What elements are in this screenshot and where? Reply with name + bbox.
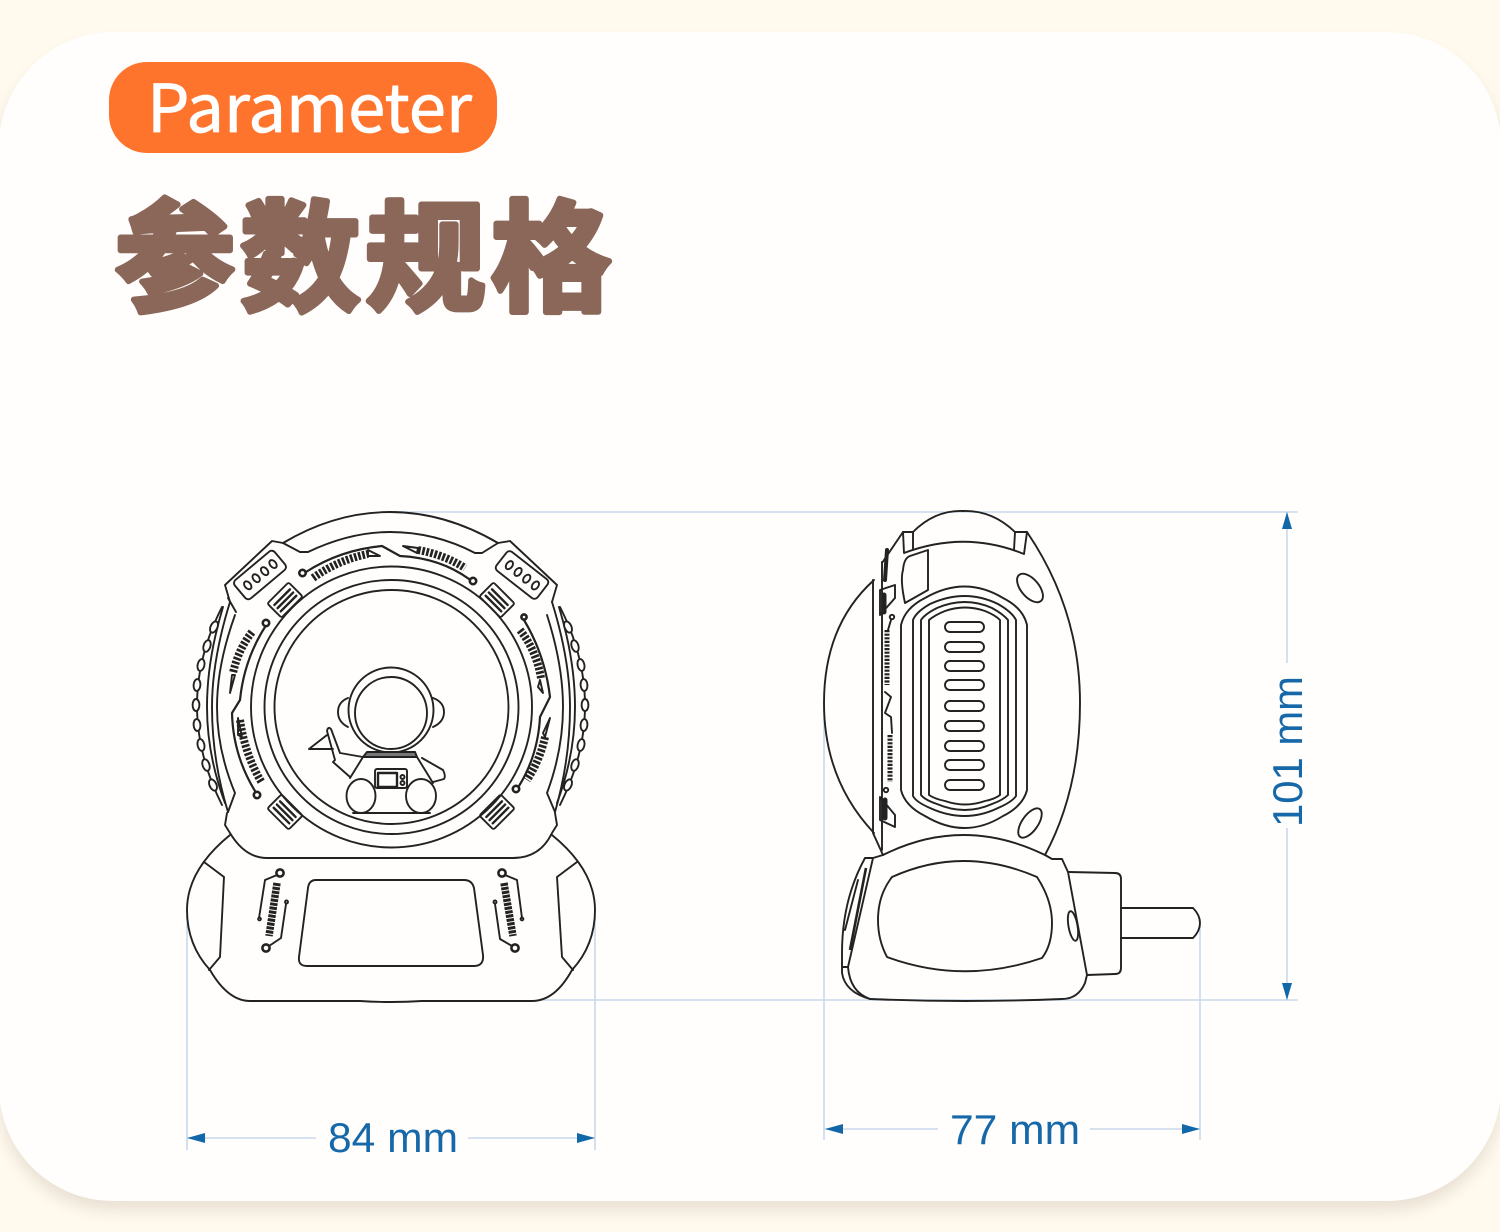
title: 参数规格: 参数规格	[115, 193, 611, 327]
base: side panels	[204, 862, 577, 970]
front view: main frame	[225, 532, 557, 858]
badge: Parameter: Parameter	[147, 56, 472, 152]
dimension: 84 mm width: 84 mm	[328, 1114, 458, 1161]
base: body outline	[848, 835, 1087, 1001]
icon: vent top right	[479, 582, 515, 618]
front view: side rails	[197, 598, 585, 812]
icon: button badge right	[494, 550, 550, 600]
base: front edge	[842, 858, 873, 999]
base: display screen	[299, 880, 483, 966]
base: left hatched band	[269, 883, 277, 936]
icon: vent top left	[267, 582, 303, 618]
dimension: 77 mm depth: 77 mm	[950, 1106, 1080, 1153]
side view: base	[842, 835, 1200, 1001]
front view: circuit traces	[232, 546, 550, 798]
front view: lens rings	[251, 566, 532, 848]
base: left circuit	[258, 869, 288, 952]
base: right hatched band	[504, 883, 513, 936]
base: small oval button	[1066, 910, 1080, 942]
icon: screw oval bottom	[1014, 804, 1046, 842]
icon: vent bottom left	[267, 794, 303, 830]
dimension: 77 mm depth	[825, 1106, 1200, 1153]
side view: front lens dome	[824, 580, 874, 833]
front view: gauge end triangles	[230, 546, 550, 737]
drawing: side view of device	[824, 511, 1200, 1001]
plug: pin	[1121, 908, 1200, 938]
icon: screw oval top	[1012, 569, 1048, 607]
side view: top band	[903, 532, 1027, 554]
base: side window	[878, 861, 1052, 971]
base: dark strip	[850, 868, 866, 950]
side view: edge hatching	[887, 630, 890, 782]
base: right circuit	[494, 869, 523, 952]
front view: bump chain left	[193, 620, 220, 792]
side view: label window	[902, 550, 928, 603]
front view: base	[187, 835, 595, 1002]
front view: top dome	[283, 512, 498, 543]
side view: rear shell	[873, 511, 1080, 855]
icon: button badge left	[232, 549, 288, 601]
base: outline	[187, 835, 595, 1002]
illustration: astronaut figure	[309, 668, 445, 813]
dimension lines: extension guides	[187, 512, 1298, 1150]
side view: edge circuit details	[880, 550, 895, 827]
front view: bump chain right	[562, 620, 588, 792]
plug: block	[1069, 872, 1121, 975]
front view: hatched gauges	[233, 550, 545, 783]
side view: speaker grille	[901, 586, 1027, 828]
drawing: front view of device	[187, 512, 595, 1002]
dimension: 101 mm height	[1264, 512, 1311, 1000]
dimension: 101 mm height: 101 mm	[1264, 676, 1311, 827]
icon: vent bottom right	[479, 794, 515, 830]
dimension: 84 mm width	[187, 1114, 595, 1161]
